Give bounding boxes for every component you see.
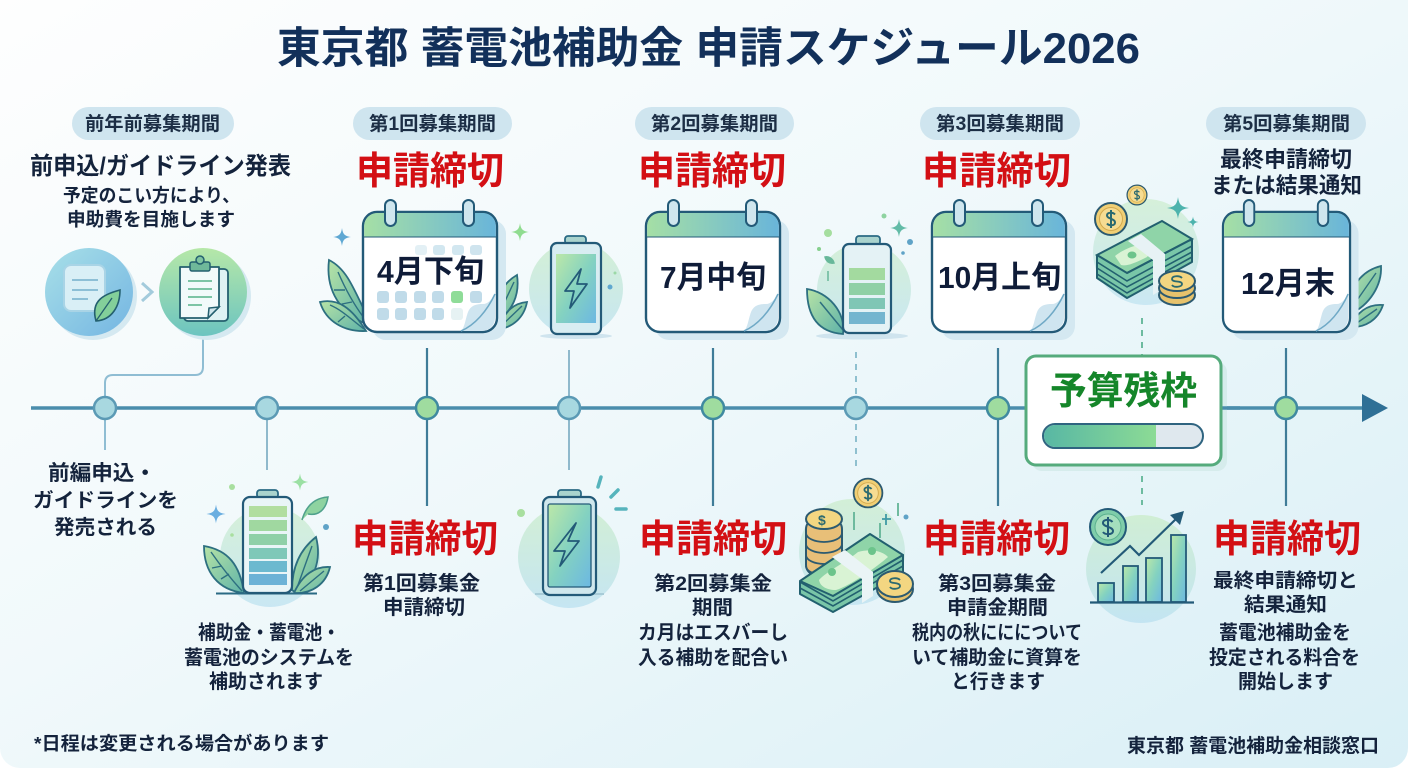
calendar: July: 7月中旬 (660, 260, 766, 295)
panel: round 3 deadline: 税内の秋ににについて (912, 622, 1082, 644)
icon: money stack with coins (upper) (1093, 185, 1199, 305)
calendar: December: 12月末 (1241, 266, 1335, 301)
title: 東京都 蓄電池補助金 申請スケジュール2026 (277, 25, 1140, 73)
panel: round 3 deadline: 申請締切 (923, 519, 1070, 561)
panel: pre-application: 申助費を目施します (67, 209, 235, 230)
callout: budget remaining (1026, 356, 1240, 471)
icon: money and coins (lower) (799, 479, 913, 612)
panel: round 3 deadline: と行きます (951, 671, 1045, 693)
panel: round 2 deadline: 入る補助を配合い (638, 647, 788, 669)
text block: subsidy description: 補助金・蓄電池・ (198, 622, 340, 644)
panel: round 2 deadline: 期間 (692, 597, 733, 619)
panel: pre-application: 前申込/ガイドライン発表 (30, 153, 291, 180)
icon: leaves (1350, 266, 1383, 327)
text block: pre-application lower: 前編申込・ (48, 462, 156, 485)
text block: subsidy description (184, 622, 354, 693)
panel: round 2 deadline (635, 107, 794, 669)
icon: clipboard (159, 248, 251, 340)
calendar: October: 10月上旬 (938, 260, 1061, 295)
panel: round 1 deadline: 第1回募集金 (363, 572, 480, 595)
panel: round 2 deadline: カ月はエスバーし (638, 622, 788, 644)
footnote: *日程は変更される場合があります (34, 733, 329, 754)
panel: round 1 deadline: 申請締切 (383, 596, 465, 619)
panel: round 3 deadline: 申請締切 (922, 151, 1071, 193)
text block: subsidy description: 蓄電池のシステムを (184, 647, 354, 669)
panel: round 5 final deadline: 申請締切 (1213, 519, 1361, 561)
panel: round 5 final deadline: 結果通知 (1244, 594, 1327, 616)
calendar: October (932, 200, 1075, 340)
icon: battery with lightning (upper) (529, 236, 623, 339)
calendar: April: 4月下旬 (377, 254, 484, 289)
calendar: April (363, 200, 506, 340)
progress bar (1043, 424, 1203, 448)
calendar: December (1223, 200, 1359, 340)
panel: round 5 final deadline: 開始します (1238, 671, 1333, 693)
panel: round 3 deadline: 第3回募集期間 (936, 113, 1064, 135)
footer: contact: 東京都 蓄電池補助金相談窓口 (1127, 735, 1379, 757)
icon: battery with lightning (lower) (517, 477, 626, 608)
timeline with arrow (31, 318, 1388, 506)
panel: pre-application: 前年前募集期間 (85, 112, 220, 135)
panel: round 3 deadline (912, 107, 1082, 693)
panel: round 1 deadline (320, 107, 529, 619)
panel: round 1 deadline: 第1回募集期間 (369, 113, 496, 135)
panel: round 2 deadline: 第2回募集期間 (651, 113, 778, 135)
icon: money and coins (lower): $ (818, 512, 826, 528)
panel: round 5 final deadline: 蓄電池補助金を (1219, 622, 1351, 644)
panel: round 5 final deadline: 第5回募集期間 (1223, 113, 1350, 135)
panel: round 3 deadline: 第3回募集金 (938, 573, 1057, 595)
panel: round 5 final deadline (1206, 107, 1383, 693)
calendar: July (646, 200, 789, 340)
icon: battery with leaves (lower) (204, 474, 330, 607)
panel: pre-application (30, 107, 291, 340)
text block: subsidy description: 補助されます (209, 671, 323, 693)
panel: round 3 deadline: いて補助金に資算を (912, 646, 1082, 669)
panel: round 5 final deadline: または結果通知 (1211, 173, 1362, 198)
panel: round 2 deadline: 申請締切 (638, 151, 786, 193)
panel: pre-application: 予定のこい方により、 (63, 185, 240, 206)
icon: growth chart (1086, 509, 1196, 623)
panel: round 1 deadline: 申請締切 (356, 151, 504, 193)
icon: chevron (142, 283, 152, 301)
panel: round 2 deadline: 第2回募集金 (654, 573, 773, 595)
panel: round 5 final deadline: 投定される料合を (1209, 647, 1360, 669)
panel: round 1 deadline: 申請締切 (352, 519, 498, 561)
icon: battery levels with leaf (upper) (807, 214, 913, 340)
text block: pre-application lower: ガイドラインを (33, 489, 178, 512)
callout: budget remaining: 予算残枠 (1050, 371, 1197, 413)
text block: pre-application lower (33, 462, 178, 539)
icon: leaves (320, 223, 529, 331)
text block: pre-application lower: 発売される (54, 516, 157, 539)
panel: round 5 final deadline: 最終申請締切 (1220, 147, 1352, 172)
panel: round 2 deadline: 申請締切 (639, 519, 787, 561)
icon: document with leaf (45, 248, 137, 340)
panel: round 3 deadline: 申請金期間 (947, 597, 1048, 619)
panel: round 5 final deadline: 最終申請締切と (1213, 570, 1358, 592)
